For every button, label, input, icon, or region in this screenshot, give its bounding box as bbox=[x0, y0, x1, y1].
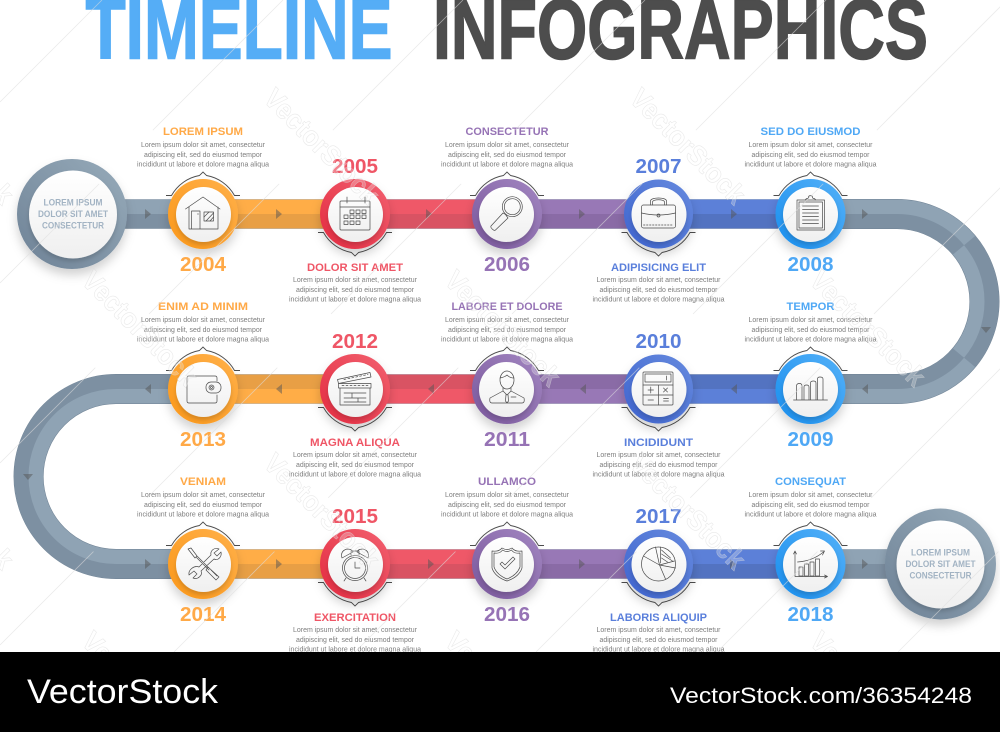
description bbox=[744, 142, 877, 168]
track row 2 bbox=[180, 374, 790, 404]
description: incididunt ut labore et dolore magna aliqua bbox=[592, 646, 725, 654]
description: incididunt ut labore et dolore magna aliqua bbox=[744, 162, 877, 168]
description bbox=[441, 142, 573, 168]
heading: LABORE ET DOLORE bbox=[452, 301, 562, 313]
description: adipiscing elit, sed do eiusmod tempor bbox=[448, 152, 567, 159]
milestone 2005 bbox=[289, 156, 421, 304]
description: incididunt ut labore et dolore magna aliqua bbox=[441, 512, 573, 518]
footer url: VectorStock.com/36354248 bbox=[670, 683, 972, 708]
icon: pie chart bbox=[642, 547, 676, 581]
description: incididunt ut labore et dolore magna aliqua bbox=[137, 336, 269, 344]
watermarks: VectorStock bbox=[624, 82, 752, 211]
description: incididunt ut labore et dolore magna aliqua bbox=[289, 472, 421, 478]
description: Lorem ipsum dolor sit amet, consectetur bbox=[748, 142, 873, 149]
icon: person bbox=[490, 371, 524, 403]
description: adipiscing elit, sed do eiusmod tempor bbox=[144, 327, 263, 334]
description: incididunt ut labore et dolore magna aliqua bbox=[592, 472, 725, 478]
description: incididunt ut labore et dolore magna aliqua bbox=[441, 162, 573, 168]
description: incididunt ut labore et dolore magna aliqua bbox=[744, 336, 877, 344]
milestone 2012 bbox=[289, 331, 421, 478]
description bbox=[441, 492, 573, 518]
footer bar bbox=[0, 652, 1000, 732]
start circle bbox=[17, 159, 127, 269]
year: 2008 bbox=[788, 254, 834, 276]
heading: ENIM AD MINIM bbox=[158, 301, 248, 313]
description: Lorem ipsum dolor sit amet, consectetur bbox=[293, 277, 418, 284]
description: incididunt ut labore et dolore magna aliqua bbox=[137, 512, 269, 518]
heading: EXERCITATION bbox=[314, 612, 396, 624]
watermarks: VectorStock bbox=[258, 447, 386, 576]
heading: INCIDIDUNT bbox=[624, 437, 693, 449]
icon: clapperboard bbox=[338, 372, 371, 405]
footer logo: VectorStock bbox=[27, 673, 219, 711]
description: incididunt ut labore et dolore magna aliqua bbox=[592, 296, 725, 304]
description: adipiscing elit, sed do eiusmod tempor bbox=[600, 462, 718, 469]
description: adipiscing elit, sed do eiusmod tempor bbox=[448, 502, 567, 509]
milestone 2009 bbox=[744, 301, 877, 451]
description bbox=[289, 627, 421, 654]
description: Lorem ipsum dolor sit amet, consectetur bbox=[748, 492, 873, 499]
description: Lorem ipsum dolor sit amet, consectetur bbox=[596, 627, 721, 634]
description bbox=[592, 627, 725, 654]
milestone 2010 bbox=[592, 331, 725, 478]
heading: DOLOR SIT AMET bbox=[307, 262, 403, 274]
track edges bbox=[29, 199, 984, 579]
icon: growth chart bbox=[794, 551, 828, 578]
heading: MAGNA ALIQUA bbox=[310, 437, 400, 449]
watermarks: VectorStock bbox=[258, 82, 386, 211]
heading: LABORIS ALIQUIP bbox=[610, 612, 707, 624]
milestone 2018 bbox=[744, 476, 877, 626]
description: incididunt ut labore et dolore magna aliqua bbox=[744, 512, 877, 518]
description: adipiscing elit, sed do eiusmod tempor bbox=[752, 152, 870, 159]
milestone 2006 bbox=[441, 126, 573, 276]
description: Lorem ipsum dolor sit amet, consectetur bbox=[596, 277, 721, 284]
year: 2012 bbox=[332, 331, 378, 353]
milestone 2008 bbox=[744, 126, 877, 276]
year: 2009 bbox=[788, 429, 834, 451]
description: Lorem ipsum dolor sit amet, consectetur bbox=[445, 142, 570, 149]
watermarks: VectorStock bbox=[624, 447, 752, 576]
watermarks: VectorStock bbox=[439, 264, 567, 393]
description bbox=[137, 317, 269, 344]
end circle label: CONSECTETUR bbox=[910, 570, 972, 582]
description: Lorem ipsum dolor sit amet, consectetur bbox=[748, 317, 873, 324]
description bbox=[441, 317, 573, 344]
heading: ADIPISICING ELIT bbox=[611, 262, 706, 274]
icon: bar chart bbox=[794, 377, 828, 400]
milestone 2017 bbox=[592, 506, 725, 654]
track row 1 bbox=[120, 200, 790, 228]
description: adipiscing elit, sed do eiusmod tempor bbox=[296, 462, 415, 469]
year: 2005 bbox=[332, 156, 378, 178]
year: 2017 bbox=[636, 506, 682, 528]
year: 2013 bbox=[180, 429, 226, 451]
description bbox=[744, 317, 877, 344]
description: Lorem ipsum dolor sit amet, consectetur bbox=[445, 317, 570, 324]
milestone 2014 bbox=[137, 476, 269, 626]
end circle label: LOREM IPSUM bbox=[911, 548, 970, 558]
description: adipiscing elit, sed do eiusmod tempor bbox=[448, 327, 567, 334]
watermarks: VectorStock bbox=[76, 264, 204, 393]
description: incididunt ut labore et dolore magna aliqua bbox=[289, 296, 421, 304]
start circle label: DOLOR SIT AMET bbox=[38, 209, 108, 220]
year: 2014 bbox=[180, 604, 227, 626]
description: Lorem ipsum dolor sit amet, consectetur bbox=[141, 492, 266, 499]
milestone 2011 bbox=[441, 301, 573, 451]
description: incididunt ut labore et dolore magna aliqua bbox=[441, 336, 573, 344]
description: adipiscing elit, sed do eiusmod tempor bbox=[144, 152, 263, 159]
milestone 2013 bbox=[137, 301, 269, 451]
description: Lorem ipsum dolor sit amet, consectetur bbox=[293, 452, 418, 459]
description: Lorem ipsum dolor sit amet, consectetur bbox=[141, 317, 266, 324]
end circle label bbox=[906, 548, 976, 582]
icon: shield bbox=[492, 548, 522, 581]
year: 2004 bbox=[180, 254, 227, 276]
icon: wallet bbox=[187, 376, 221, 403]
description bbox=[289, 452, 421, 478]
description: Lorem ipsum dolor sit amet, consectetur bbox=[141, 142, 266, 149]
description: adipiscing elit, sed do eiusmod tempor bbox=[752, 327, 870, 334]
description: adipiscing elit, sed do eiusmod tempor bbox=[144, 502, 263, 509]
icon: tools bbox=[188, 548, 221, 580]
description bbox=[592, 277, 725, 304]
year: 2018 bbox=[788, 604, 834, 626]
milestone 2007 bbox=[592, 156, 725, 304]
description: Lorem ipsum dolor sit amet, consectetur bbox=[596, 452, 721, 459]
milestone 2016 bbox=[441, 476, 573, 626]
start circle label bbox=[38, 198, 108, 232]
year: 2011 bbox=[484, 429, 530, 451]
heading: TEMPOR bbox=[786, 301, 835, 313]
heading: SED DO EIUSMOD bbox=[760, 126, 861, 138]
heading: LOREM IPSUM bbox=[163, 126, 243, 138]
year: 2015 bbox=[332, 506, 378, 528]
end circle label: DOLOR SIT AMET bbox=[906, 559, 976, 570]
description bbox=[289, 277, 421, 304]
description bbox=[592, 452, 725, 478]
year: 2016 bbox=[484, 604, 530, 626]
description bbox=[744, 492, 877, 518]
icon: calculator bbox=[643, 372, 673, 405]
left curve bbox=[21, 382, 180, 571]
description: incididunt ut labore et dolore magna aliqua bbox=[289, 646, 421, 654]
watermarks: VectorStock bbox=[804, 264, 932, 393]
description: adipiscing elit, sed do eiusmod tempor bbox=[600, 287, 718, 294]
description: incididunt ut labore et dolore magna aliqua bbox=[137, 162, 269, 168]
heading: VENIAM bbox=[180, 476, 226, 488]
year: 2010 bbox=[636, 331, 682, 353]
direction arrows bbox=[23, 209, 991, 569]
right curve bbox=[790, 214, 992, 389]
description: adipiscing elit, sed do eiusmod tempor bbox=[752, 502, 870, 509]
start circle label: CONSECTETUR bbox=[42, 220, 104, 232]
description: adipiscing elit, sed do eiusmod tempor bbox=[296, 637, 415, 644]
icon: house bbox=[186, 197, 220, 229]
description bbox=[137, 142, 269, 168]
year: 2006 bbox=[484, 254, 530, 276]
end circle bbox=[885, 508, 996, 620]
icon: magnifier bbox=[491, 197, 522, 230]
description bbox=[137, 492, 269, 518]
track row 3 bbox=[180, 550, 895, 578]
icon: alarm clock bbox=[342, 549, 368, 581]
heading: ULLAMCO bbox=[478, 476, 536, 488]
description: Lorem ipsum dolor sit amet, consectetur bbox=[445, 492, 570, 499]
icon: calendar bbox=[340, 197, 370, 230]
icon: briefcase bbox=[642, 198, 676, 228]
year: 2007 bbox=[636, 156, 682, 178]
heading: CONSEQUAT bbox=[775, 476, 846, 488]
title bbox=[86, 0, 928, 78]
timeline track bbox=[21, 199, 992, 579]
milestone 2004 bbox=[137, 126, 269, 276]
description: adipiscing elit, sed do eiusmod tempor bbox=[600, 637, 718, 644]
description: adipiscing elit, sed do eiusmod tempor bbox=[296, 287, 415, 294]
start circle label: LOREM IPSUM bbox=[44, 198, 103, 208]
description: Lorem ipsum dolor sit amet, consectetur bbox=[293, 627, 418, 634]
icon: clipboard bbox=[797, 196, 824, 230]
heading: CONSECTETUR bbox=[466, 126, 549, 138]
milestone 2015 bbox=[289, 506, 421, 654]
